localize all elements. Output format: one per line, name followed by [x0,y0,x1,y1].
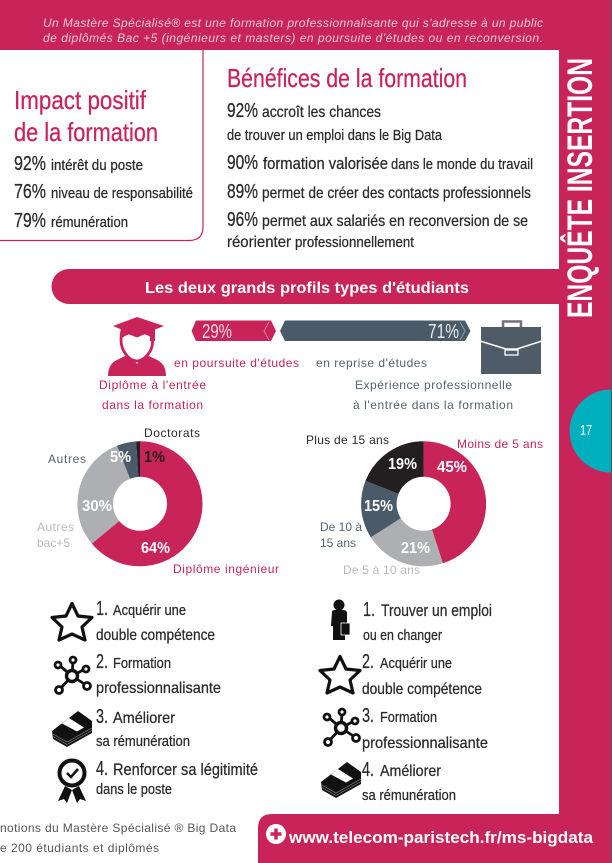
profile captions: dans la formation [102,398,203,412]
panel: bénéfices [227,63,533,251]
bar: 71% [280,320,470,343]
benefit stats: réorienter [227,234,292,251]
donut labels: expérience: Plus de 15 ans [306,433,389,447]
left list text: Acquérir une [113,602,186,619]
donut labels: expérience: 15 ans [320,536,356,550]
benefit stats: professionnellement [295,234,415,251]
left list text: 2. [96,651,108,673]
right list text: Trouver un emploi [381,601,492,620]
donut labels: expérience: Moins de 5 ans [457,437,543,451]
right list text: Acquérir une [380,655,452,672]
donut labels: diplôme [37,426,279,576]
page number tab [570,390,611,472]
impact stats: 76% [14,181,46,203]
icon: plus [266,824,286,844]
heading: impact: Impact positif [14,85,147,115]
benefit stats: accroît les chances [262,104,381,121]
impact stats: 92% [14,153,46,175]
top banner: de diplômés Bac +5 (ingénieurs et masters) en poursuite d'études ou en reconversion. [43,31,543,45]
benefit stats: dans le monde du travail [391,156,533,173]
icon: businessman [331,600,350,640]
section heading: profils [52,269,559,304]
icon: banknotes [321,762,361,798]
donut labels: diplôme: bac+5 [37,536,70,550]
donut labels: diplôme: Autres [37,520,74,534]
source note: e 200 étudiants et diplômés [0,841,159,855]
impact stats: intérêt du poste [51,157,143,174]
left list text: 4. [96,758,108,780]
donut labels: diplôme: Doctorats [144,426,200,440]
icon: star [320,656,360,693]
left list text: double compétence [96,627,215,644]
benefit stats: 89% [227,181,258,203]
icon: banknotes [52,711,92,747]
donut labels: expérience: De 5 à 10 ans [343,563,420,577]
impact stats: rémunération [51,214,128,231]
profile captions: à l'entrée dans la formation [353,398,513,412]
right list text [362,599,492,804]
left list text: sa rémunération [96,733,190,750]
right list text: sa rémunération [362,787,456,804]
benefit stats: permet de créer des contacts professionnels [262,185,531,202]
donut values: expérience: 19% [388,456,417,473]
donut labels: expérience [306,433,543,577]
left list text: dans le poste [96,781,172,798]
right list text: professionnalisante [362,735,488,752]
benefit stats: 92% [227,100,258,122]
right list text: Formation [380,709,437,726]
icon: briefcase [480,322,542,374]
right list text: 3. [362,705,374,727]
source note [0,821,236,855]
impact stats: niveau de responsabilité [51,185,193,202]
left list text: Renforcer sa légitimité [113,760,258,779]
bar: 71%: 71% [428,321,459,343]
right list text: 4. [362,759,374,781]
left list text: professionnalisante [96,680,221,697]
profile captions: Expérience professionnelle [355,378,512,392]
icon: network [55,657,90,694]
icon: star [52,604,92,640]
right list text: 2. [362,651,374,673]
list: motivations right [320,599,492,804]
icon: graduate [108,317,166,376]
donut values: diplôme: 64% [141,540,170,557]
donut values: diplôme: 1% [144,449,165,466]
profile captions [99,356,513,412]
donut values: diplôme: 30% [82,498,112,515]
impact stats [14,153,193,232]
top banner [0,0,612,50]
profile captions: en poursuite d'études [174,356,299,370]
profile captions: Diplôme à l'entrée [99,378,206,392]
list: motivations left [52,598,258,803]
footer URL band [258,814,612,863]
donut labels: expérience: De 10 à [320,520,362,534]
benefit stats: permet aux salariés en reconversion de se [262,213,528,230]
impact stats: 79% [14,210,46,232]
right list text: ou en changer [363,627,442,644]
donut chart: expérience [379,459,468,549]
donut labels: diplôme: Autres [48,452,86,466]
right list text: Améliorer [380,763,442,780]
heading: bénéfices: Bénéfices de la formation [227,63,467,93]
donut values: diplôme: 5% [110,449,131,466]
heading: impact: de la formation [14,117,158,147]
icon: network [324,709,360,746]
left list text [96,598,258,798]
donut values: expérience: 45% [437,459,467,476]
source note: notions du Mastère Spécialisé ® Big Data [0,821,236,835]
panel: impact positif [0,50,203,240]
benefit stats: formation valorisée [263,154,388,173]
right list text: double compétence [362,681,482,698]
left list text: Améliorer [113,710,176,727]
donut values: expérience: 21% [401,540,430,557]
benefit stats: de trouver un emploi dans le Big Data [227,127,443,144]
right sidebar [559,0,612,863]
right list text: 1. [363,599,375,621]
bar: 29% [192,320,276,343]
donut values: expérience: 15% [364,498,393,515]
section heading: profils: Les deux grands profils types d'étudiants [145,280,469,297]
bar: 29%: 29% [202,321,232,343]
profile captions: en reprise d'études [316,356,427,370]
benefit stats: 96% [227,209,258,231]
left list text: Formation [113,655,171,672]
donut values: diplôme [82,449,170,557]
icon: certified badge [58,760,86,803]
donut labels: diplôme: Diplôme ingénieur [173,562,279,576]
top banner: Un Mastère Spécialisé® est une formation professionnalisante qui s'adresse à un public [43,16,543,30]
benefit stats: 90% [227,152,258,174]
page number tab: 17 [580,422,592,439]
donut values: expérience [364,456,467,557]
left list text: 1. [96,598,108,620]
benefit stats [227,100,533,251]
heading: impact [14,85,158,147]
left list text: 3. [96,706,108,728]
donut chart: diplôme [95,459,185,549]
URL: www.telecom-paristech.fr/ms-bigdata [288,828,594,847]
